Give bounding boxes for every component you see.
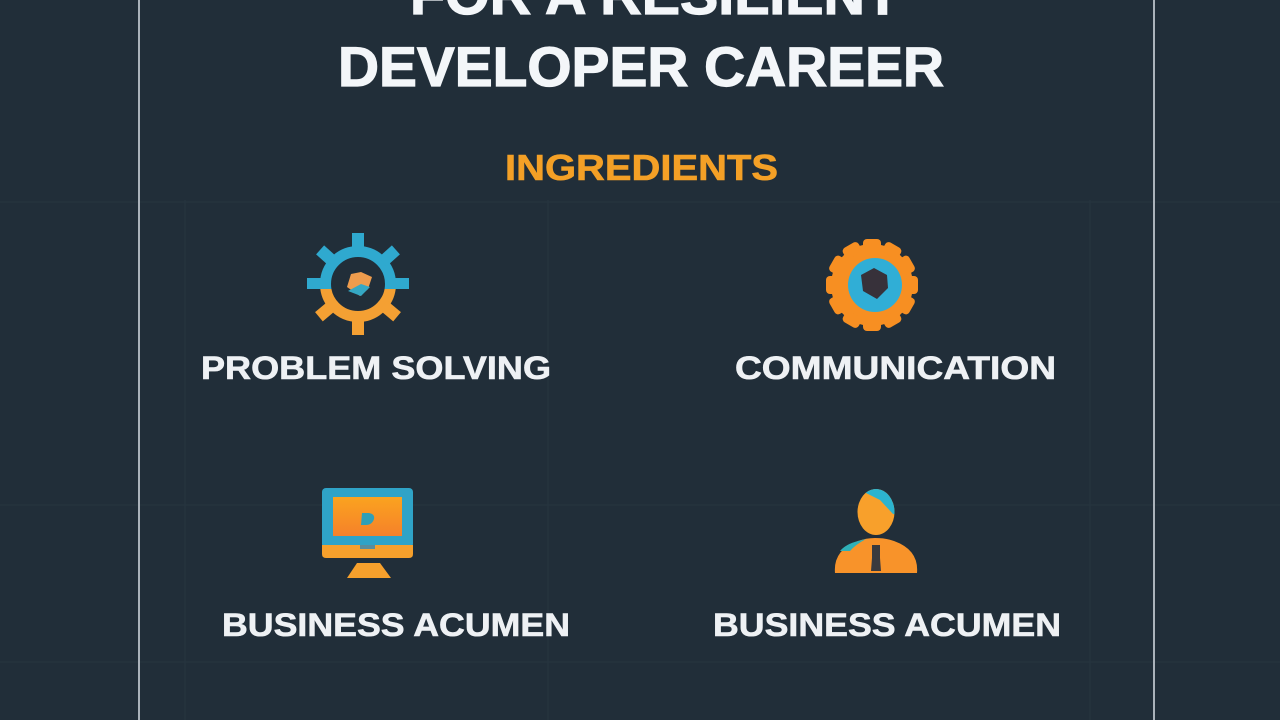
label: PROBLEM SOLVING <box>201 350 551 386</box>
icon: two-tone gear <box>307 233 409 335</box>
ingredient: business acumen, left <box>222 488 570 643</box>
label: BUSINESS ACUMEN <box>713 607 1061 643</box>
ingredient: communication <box>735 239 1056 386</box>
icon: orange gear <box>826 239 918 331</box>
title <box>338 0 944 98</box>
icon: person with tie <box>834 489 918 573</box>
ingredient: problem solving <box>201 233 551 386</box>
icon: monitor <box>322 488 413 578</box>
label: COMMUNICATION <box>735 350 1056 386</box>
ingredient: business acumen, right <box>715 489 1059 636</box>
heading: ingredients: INGREDIENTS <box>505 147 778 188</box>
title: DEVELOPER CAREER <box>338 35 944 98</box>
label: BUSINESS ACUMEN <box>222 607 570 643</box>
